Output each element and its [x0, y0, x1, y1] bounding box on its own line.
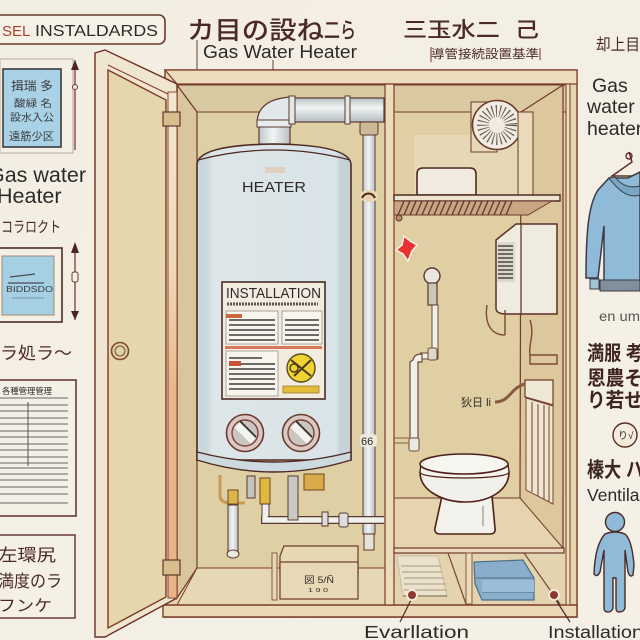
- pipe number tag: [360, 434, 377, 447]
- badge: install standards: INSTALDARDS: [35, 23, 158, 40]
- left panel: blue info card: 遠筋少区: [9, 129, 54, 143]
- cabinet door: [95, 50, 180, 637]
- right compartment floor: [394, 498, 563, 548]
- left panel: blue info card: 設水入公: [10, 112, 54, 124]
- door handle: [112, 342, 128, 360]
- right text: japanese paragraph: [587, 342, 640, 412]
- left panel: blue chart card: [0, 242, 79, 322]
- left compartment back wall: [197, 112, 385, 568]
- right text: gas water heater: [586, 75, 640, 140]
- person icon: [594, 512, 634, 612]
- right post: [566, 84, 570, 605]
- ventilation icon: り√: [618, 430, 634, 442]
- flue pipe: [257, 96, 384, 144]
- left panel: notes: 満度のラ: [0, 572, 62, 591]
- left panel: table: [0, 380, 76, 516]
- left panel: table: 各種管理管理: [2, 386, 52, 396]
- top heading: secondary label: [403, 19, 540, 62]
- cabinet: [163, 70, 577, 617]
- lower bay posts: [466, 553, 472, 604]
- stacked towels: [397, 556, 447, 596]
- badge: install standards: [0, 15, 165, 44]
- right text: gas water heater: Gas: [592, 75, 628, 97]
- right text: gas water heater: water: [586, 96, 635, 118]
- left panel: blue chart card: BIDDSDO: [6, 285, 53, 294]
- ventilation fan: [471, 100, 522, 152]
- dial right: [282, 414, 320, 452]
- side plumbing and radiator: [461, 305, 557, 504]
- top heading: gas water heater: Gas Water Heater: [203, 42, 357, 62]
- cabinet outer frame: [165, 70, 577, 617]
- toilet rim: [420, 464, 509, 478]
- vertical water pipe: 66: [361, 436, 373, 448]
- water heater tank: HEATER: [242, 179, 306, 196]
- shelf: [394, 195, 560, 221]
- right text: ventilation: [587, 459, 640, 505]
- top heading: secondary label: 導管接続設置基準: [431, 46, 539, 61]
- warning icon: [287, 354, 315, 382]
- cardboard box: 図 5/Ñ: [304, 575, 334, 585]
- left text: japanese caption: ラ処ラ～: [0, 344, 72, 363]
- top heading: gas water heater: カ目の設ね: [187, 17, 324, 45]
- callout: evarllation: [364, 590, 469, 640]
- sweater on hanger: [586, 152, 640, 291]
- water heater tank: [197, 144, 351, 472]
- right compartment ceiling: [394, 85, 566, 112]
- lower storage bay: [394, 553, 564, 605]
- ventilation icon: [613, 423, 637, 447]
- shelf floor edge: [394, 548, 564, 553]
- right compartment shadow panel: [414, 135, 518, 195]
- right text: ventilation: Ventila: [587, 485, 640, 505]
- red star marker: [396, 236, 417, 261]
- wall-mounted unit: [496, 224, 557, 314]
- installation plate: [222, 282, 325, 399]
- tank label: [265, 167, 285, 173]
- top heading: secondary label: 己: [515, 19, 539, 42]
- cardboard box: [272, 546, 358, 600]
- toilet lid: [420, 454, 508, 474]
- left compartment side wall: [177, 85, 197, 598]
- left panel: blue info card: 揖瑞 多: [11, 79, 53, 93]
- top heading: secondary label: 三玉水二: [403, 19, 500, 42]
- toilet: [420, 454, 509, 534]
- pipe tag: [361, 190, 377, 202]
- right compartment back wall: [394, 112, 566, 499]
- wall post near fan: [518, 112, 533, 195]
- side plumbing and radiator: 狄日 li: [461, 396, 491, 409]
- door hinge bottom: [163, 560, 180, 575]
- left compartment floor: [177, 568, 385, 605]
- right caption: enum: en um: [599, 308, 640, 324]
- top heading: gas water heater: 二ら: [324, 18, 356, 43]
- vertical water pipe: [360, 122, 378, 534]
- left panel: blue info card: [0, 59, 79, 153]
- left panel: notes: [0, 535, 75, 618]
- wall box on shelf: [417, 168, 476, 195]
- left compartment ceiling: [177, 85, 385, 112]
- toilet bowl: [420, 472, 509, 502]
- heater plumbing: [220, 474, 384, 558]
- badge: install standards: SEL: [2, 23, 30, 40]
- left text: gas water heater: コラロクト: [1, 219, 61, 236]
- top heading: gas water heater: [187, 17, 357, 73]
- left panel: blue info card: 酸緑 名: [14, 97, 52, 110]
- dial left: [226, 414, 264, 452]
- stacked blue folders: [474, 560, 534, 600]
- gas valve: [394, 268, 440, 451]
- centre post: [385, 84, 394, 605]
- right compartment side wall: [520, 85, 563, 548]
- cabinet top plate: [165, 70, 577, 84]
- installation plate: INSTALLATION: [226, 286, 321, 302]
- left text: gas water heater: [0, 163, 86, 236]
- base plate: [163, 605, 577, 617]
- callout: installation: [548, 590, 640, 640]
- door hinge top: [163, 112, 180, 126]
- toilet pedestal: [435, 496, 495, 534]
- cardboard box: 1 9 0: [308, 588, 328, 594]
